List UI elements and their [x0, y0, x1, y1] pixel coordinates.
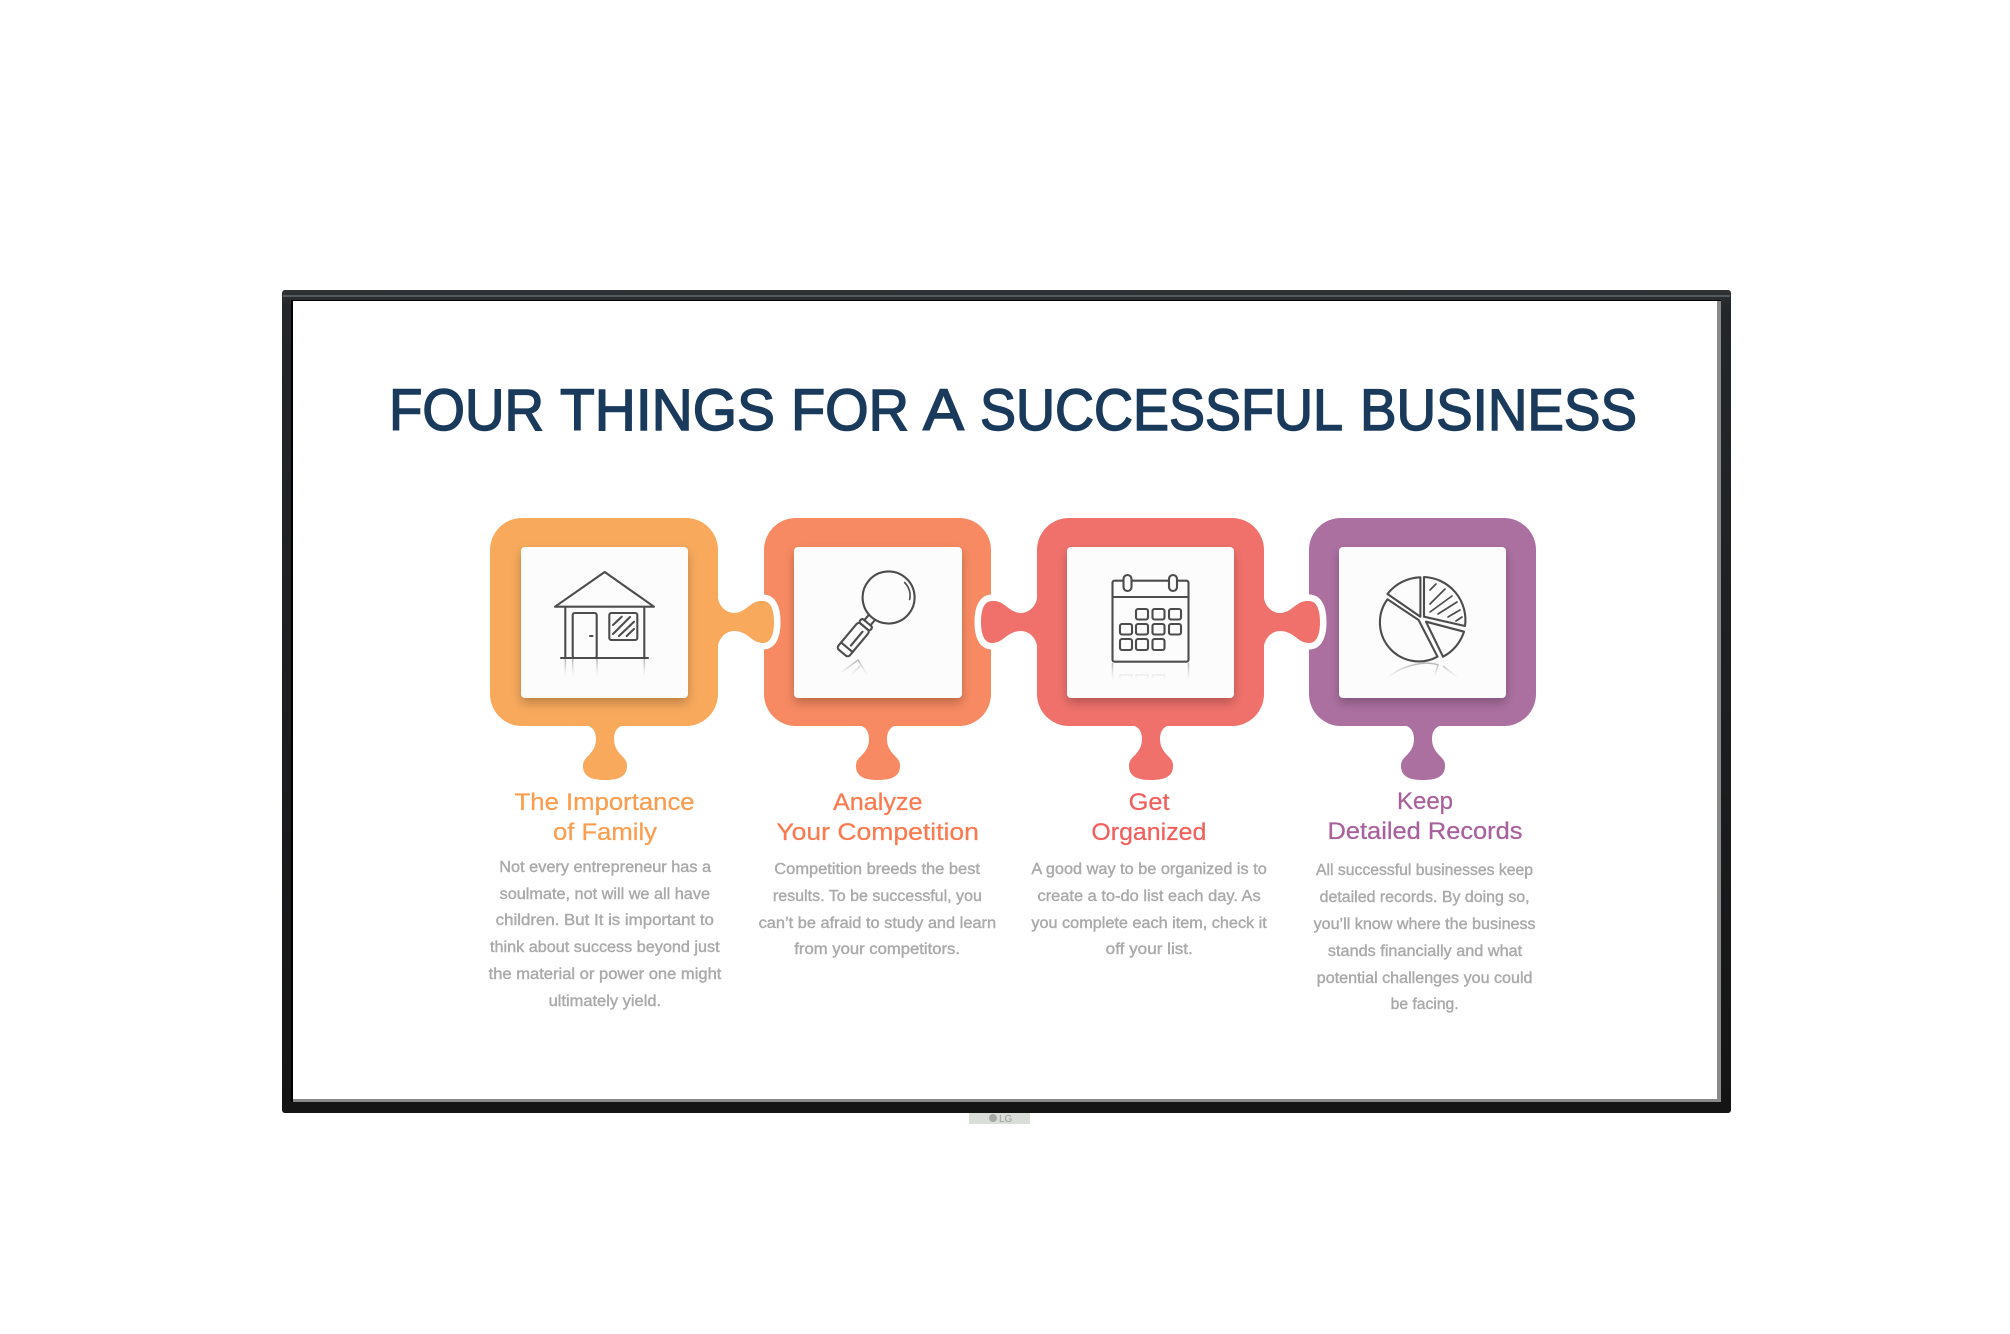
connector: piece 1 to piece 2: [718, 598, 774, 646]
pie reflection: [1388, 663, 1458, 678]
connector: piece 3 to piece 2: [981, 598, 1037, 646]
bottom tab: [583, 725, 627, 780]
text block: competition: from your competitors.: [794, 941, 960, 958]
text block: competition: can’t be afraid to study and learn: [759, 915, 996, 932]
text block: records: All successful businesses keep: [1316, 862, 1533, 879]
icon: pie chart: [1380, 577, 1465, 661]
text block: records: be facing.: [1391, 996, 1459, 1013]
puzzle piece 2 body: [764, 518, 991, 726]
magnifier reflection: [842, 660, 868, 676]
bottom tab: [1401, 725, 1445, 780]
heading: The Importance of Family: [515, 789, 695, 846]
text block: family: the material or power one might: [489, 966, 722, 983]
connector: piece 3 to piece 4: [1264, 598, 1320, 646]
title: FOUR: [389, 378, 544, 443]
text block: records: detailed records. By doing so,: [1320, 889, 1530, 906]
text block: organized: you complete each item, check it: [1031, 915, 1268, 932]
text block: competition: Competition breeds the best: [774, 861, 981, 878]
heading: Analyze Your Competition: [776, 789, 979, 846]
title: BUSINESS: [1360, 378, 1637, 443]
icon: house: [555, 572, 654, 658]
puzzle piece 4 body: [1309, 518, 1536, 726]
text block: family: think about success beyond just: [490, 939, 720, 956]
text block: family: [489, 859, 722, 1010]
heading: Get Organized: Get: [1129, 789, 1170, 816]
heading: Analyze Your Competition: Your Competition: [776, 819, 979, 846]
heading: The Importance of Family: The Importance: [515, 789, 695, 816]
white card: [794, 547, 962, 698]
white card: [521, 547, 688, 698]
heading: Keep Detailed Records: [1328, 788, 1522, 845]
heading: Analyze Your Competition: Analyze: [833, 789, 922, 816]
heading: Keep Detailed Records: Keep: [1397, 788, 1453, 815]
monitor frame: [282, 290, 1731, 1113]
text block: organized: [1031, 861, 1268, 958]
bottom tab: [856, 725, 900, 780]
text block: records: stands financially and what: [1328, 943, 1523, 960]
white card: [1067, 547, 1234, 698]
text block: organized: A good way to be organized is to: [1031, 861, 1267, 878]
icon: calendar: [1112, 575, 1188, 662]
text block: organized: create a to-do list each day. As: [1038, 888, 1261, 905]
title: A: [923, 378, 964, 443]
heading: Get Organized: [1091, 789, 1206, 846]
icon: magnifying glass: [822, 561, 925, 669]
bottom tab: [1129, 725, 1173, 780]
white card: [1339, 547, 1506, 698]
text block: records: you’ll know where the business: [1314, 916, 1536, 933]
panel: records puzzle piece: [1309, 518, 1536, 780]
heading: Keep Detailed Records: Detailed Records: [1328, 818, 1522, 845]
title: FOR: [791, 378, 909, 443]
LG stand tab: LG: [999, 1114, 1013, 1125]
heading: Get Organized: Organized: [1091, 819, 1206, 846]
title: [389, 378, 1637, 443]
panel: family puzzle piece: [490, 518, 718, 780]
text block: family: ultimately yield.: [549, 993, 661, 1010]
panel: competition puzzle piece: [764, 518, 991, 780]
text block: family: Not every entrepreneur has a: [499, 859, 711, 876]
text block: family: children. But It is important to: [496, 912, 714, 929]
house reflection: [565, 659, 644, 677]
title: THINGS: [560, 378, 775, 443]
text block: competition: [759, 861, 996, 958]
text block: family: soulmate, not will we all have: [500, 886, 710, 903]
text block: competition: results. To be successful, you: [773, 888, 982, 905]
text block: organized: off your list.: [1106, 941, 1193, 958]
panel: organized puzzle piece: [1037, 518, 1264, 780]
LG stand tab: [969, 1113, 1030, 1125]
text block: records: [1314, 862, 1536, 1013]
heading: The Importance of Family: of Family: [553, 819, 658, 846]
title: SUCCESSFUL: [980, 378, 1343, 443]
text block: records: potential challenges you could: [1317, 970, 1532, 987]
calendar reflection: [1112, 663, 1188, 680]
